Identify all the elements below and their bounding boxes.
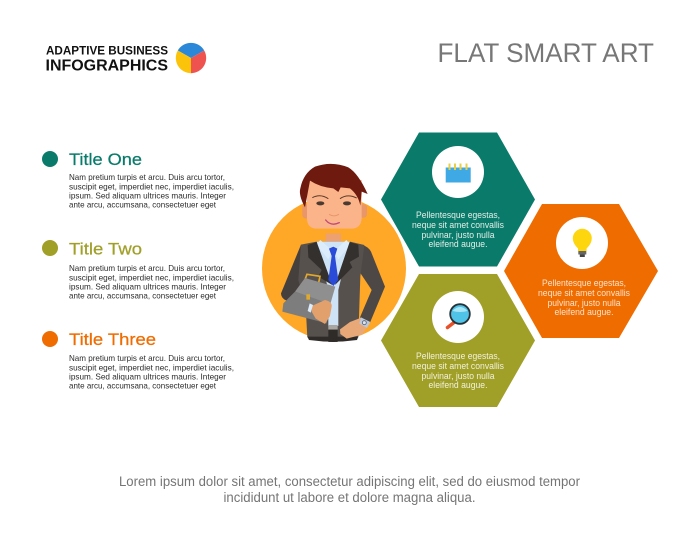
icon circle bbox=[432, 291, 484, 343]
jacket torso bbox=[298, 242, 364, 337]
orange circle backdrop bbox=[262, 196, 406, 340]
head bbox=[300, 164, 368, 229]
body text: ipsum. Sed aliquam ultrices mauris. Integer bbox=[69, 372, 226, 382]
logo pie icon bbox=[176, 43, 206, 73]
briefcase bbox=[282, 274, 335, 323]
orange shape bbox=[504, 204, 658, 338]
tie bbox=[328, 247, 338, 286]
icon: magnifier bbox=[448, 304, 470, 328]
body text: ante arcu, accumsana, consectetuer eget bbox=[69, 290, 217, 300]
heading: Title Two bbox=[69, 239, 142, 258]
neck bbox=[326, 233, 341, 250]
bullet teal bbox=[42, 151, 58, 167]
cuff left bbox=[308, 303, 313, 313]
hair bbox=[300, 164, 368, 207]
trousers bbox=[307, 330, 358, 342]
body text: suscipit eget, imperdiet nec, imperdiet iaculis, bbox=[69, 182, 234, 192]
item: Title Two bbox=[42, 239, 234, 300]
body bbox=[281, 233, 385, 342]
left hand bbox=[312, 300, 332, 324]
handle bbox=[305, 274, 320, 283]
text: neque sit amet convallis bbox=[412, 361, 505, 371]
body text: ante arcu, accumsana, consectetuer eget bbox=[69, 200, 217, 210]
text bbox=[538, 278, 631, 317]
hexagon: orange bbox=[504, 204, 658, 338]
text: Pellentesque egestas, bbox=[542, 278, 626, 288]
text bbox=[412, 210, 505, 249]
text: Pellentesque egestas, bbox=[416, 351, 500, 361]
text: eleifend augue. bbox=[428, 239, 488, 249]
body text: Nam pretium turpis et arcu. Duis arcu tortor, bbox=[69, 263, 225, 273]
body text: suscipit eget, imperdiet nec, imperdiet iaculis, bbox=[69, 272, 234, 282]
text: Pellentesque egestas, bbox=[416, 210, 500, 220]
bullet orange bbox=[42, 331, 58, 347]
case lower bbox=[282, 292, 330, 323]
body text: Nam pretium turpis et arcu. Duis arcu tortor, bbox=[69, 353, 225, 363]
body text: suscipit eget, imperdiet nec, imperdiet iaculis, bbox=[69, 362, 234, 372]
footer text: incididunt ut labore et dolore magna aliqua. bbox=[224, 490, 476, 505]
text: eleifend augue. bbox=[428, 380, 488, 390]
lapels bbox=[308, 242, 359, 285]
left arm bbox=[281, 245, 320, 314]
body text: ipsum. Sed aliquam ultrices mauris. Integer bbox=[69, 190, 226, 200]
right hand on hip bbox=[340, 318, 369, 339]
body text: Nam pretium turpis et arcu. Duis arcu tortor, bbox=[69, 172, 225, 182]
logo bbox=[46, 43, 206, 75]
body text bbox=[69, 263, 234, 300]
body text: ipsum. Sed aliquam ultrices mauris. Integer bbox=[69, 282, 226, 292]
olive shape bbox=[381, 274, 535, 407]
icon: notepad bbox=[446, 164, 471, 182]
face bbox=[307, 180, 362, 229]
icon circle bbox=[432, 146, 484, 198]
text bbox=[412, 351, 505, 390]
teal shape bbox=[381, 132, 535, 266]
logo text bbox=[46, 44, 168, 75]
ears bbox=[302, 204, 310, 218]
item: Title Three bbox=[42, 330, 234, 390]
hexagon: olive bbox=[381, 274, 535, 407]
text: neque sit amet convallis bbox=[538, 288, 631, 298]
belt bbox=[328, 325, 338, 330]
body text bbox=[69, 353, 234, 390]
bullet olive bbox=[42, 240, 58, 256]
clasp bbox=[306, 294, 310, 300]
cuff and watch bbox=[359, 317, 370, 328]
collar bbox=[316, 240, 350, 259]
nose bbox=[329, 214, 339, 216]
text: pulvinar, justo nulla bbox=[422, 230, 495, 240]
hexagon: teal bbox=[381, 132, 535, 266]
item: Title One bbox=[42, 150, 234, 210]
text: pulvinar, justo nulla bbox=[548, 298, 621, 308]
text: neque sit amet convallis bbox=[412, 220, 505, 230]
logo text: INFOGRAPHICS bbox=[46, 58, 168, 75]
eyes bbox=[316, 201, 324, 205]
logo text: ADAPTIVE BUSINESS bbox=[46, 44, 168, 58]
right arm bbox=[358, 245, 385, 323]
businessman illustration bbox=[262, 164, 406, 342]
footer text bbox=[119, 474, 580, 505]
title: FLAT SMART ART bbox=[438, 38, 654, 68]
icon circle bbox=[556, 217, 608, 269]
icon: light bulb bbox=[573, 229, 592, 257]
body text bbox=[69, 172, 234, 210]
text: eleifend augue. bbox=[554, 307, 614, 317]
brows bbox=[312, 196, 357, 199]
heading: Title One bbox=[69, 150, 142, 169]
text: pulvinar, justo nulla bbox=[422, 371, 495, 381]
shirt bbox=[317, 242, 350, 326]
body text: ante arcu, accumsana, consectetuer eget bbox=[69, 380, 217, 390]
mouth bbox=[326, 220, 339, 224]
case upper bbox=[295, 278, 335, 304]
heading: Title Three bbox=[69, 330, 156, 349]
footer text: Lorem ipsum dolor sit amet, consectetur adipiscing elit, sed do eiusmod tempor bbox=[119, 474, 580, 489]
